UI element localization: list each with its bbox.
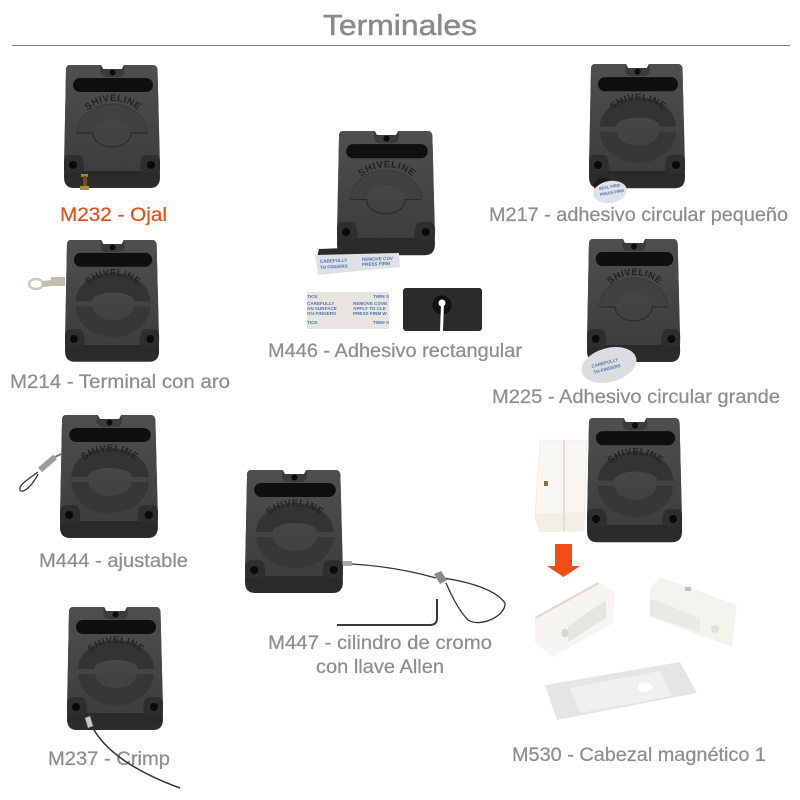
label M232: M232 - Ojal (60, 205, 167, 226)
icon: adhesive strip (307, 292, 389, 329)
icon: large adhesive disc: TH FINGERS (593, 363, 621, 375)
box photo M214 (65, 240, 160, 362)
icon: adhesive plate attached to box (315, 246, 400, 275)
icon: brass eyelet (80, 174, 89, 190)
icon: adhesive plate attached to box: TH FINGERS (320, 264, 348, 270)
box photo M225: SHIVELINE (607, 268, 662, 284)
product: M214 ring terminal (10, 240, 230, 393)
icon: black adhesive plate (403, 288, 482, 331)
icon: magnetic block right (650, 577, 737, 647)
label M530: M530 - Cabezal magnético 1 (512, 745, 766, 766)
icon: magnetic block left (535, 582, 615, 657)
icon: crimp wire (85, 716, 180, 788)
icon: adhesive strip: CAREFULLY (307, 301, 334, 306)
icon: adhesive plate attached to box: CAREFULLY (320, 258, 347, 264)
label M447: M447 - cilindro de cromo (268, 633, 492, 654)
box photo M447 (245, 470, 343, 593)
product: M232 eyelet (60, 65, 167, 226)
icon: adhesive plate attached to box: REMOVE COV (362, 256, 394, 262)
product: M225 large circular adhesive (492, 239, 780, 408)
icon: large adhesive disc (578, 341, 640, 389)
label M217: M217 - adhesivo circular pequeño (489, 205, 788, 226)
icon: Allen key (337, 599, 437, 625)
product: M530 magnetic head (512, 418, 766, 766)
box photo M232 (64, 65, 160, 188)
icon: adhesive strip: ITH FINGERS (307, 311, 336, 316)
icon: adhesive strip: TICK (307, 320, 318, 325)
icon: adjustable wire loop (20, 454, 61, 491)
icon: adhesive strip: TWIN S (373, 320, 389, 325)
box photo M447: SHIVELINE (266, 500, 324, 514)
box photo M446: SHIVELINE (358, 160, 416, 176)
box photo M232: SHIVELINE (85, 94, 142, 110)
arrow (547, 544, 580, 577)
box photo M225 (587, 239, 680, 362)
icon: wire and ferrule (343, 561, 505, 623)
icon: small adhesive disc (591, 178, 629, 206)
icon: adhesive strip: APPLY TO CLE (353, 306, 386, 311)
box photo M217: SHIVELINE (610, 94, 666, 109)
box photo M217 (589, 64, 685, 188)
product: M447 chrome cylinder with Allen key (245, 470, 506, 678)
icon: adhesive strip: PRESS FIRM W (353, 311, 387, 316)
label M447 (268, 633, 492, 678)
icon: assembled magnetic contact (535, 440, 587, 532)
icon: adhesive sheet (545, 662, 697, 720)
product: M217 small circular adhesive (489, 64, 788, 226)
product: M237 crimp (48, 607, 180, 789)
box photo M237: SHIVELINE (88, 636, 144, 652)
product: M444 adjustable (19, 415, 188, 572)
box photo M446 (337, 131, 435, 256)
box photo M214: SHIVELINE (86, 269, 141, 284)
box photo M530: SHIVELINE (608, 448, 664, 463)
product: M446 rectangular adhesive (268, 131, 523, 362)
label M225: M225 - Adhesivo circular grande (492, 387, 780, 408)
icon: adhesive strip: REMOVE COVE (353, 301, 387, 306)
label M237: M237 - Crimp (48, 749, 170, 770)
label M446: M446 - Adhesivo rectangular (268, 341, 523, 362)
box photo M530 (587, 418, 682, 542)
icon: large adhesive disc: CAREFULLY (591, 357, 619, 369)
icon: small adhesive disc: PRESS FIRM (599, 188, 625, 197)
label M444: M444 - ajustable (39, 551, 188, 572)
box photo M237 (67, 607, 163, 730)
icon: adhesive strip: AN SURFACE (307, 306, 337, 311)
box photo M444 (60, 415, 158, 538)
icon: adhesive strip: TICK (307, 294, 318, 299)
icon: ring lug (29, 277, 65, 289)
icon: small adhesive disc: SEAL FIRM (598, 182, 621, 191)
label M447: con llave Allen (316, 657, 444, 678)
title: Terminales (323, 10, 477, 42)
icon: adhesive plate attached to box: PRESS FIRM (362, 261, 390, 267)
icon: adhesive strip: TWIN S (373, 294, 389, 299)
box photo M444: SHIVELINE (81, 444, 139, 460)
label M214: M214 - Terminal con aro (10, 372, 230, 393)
